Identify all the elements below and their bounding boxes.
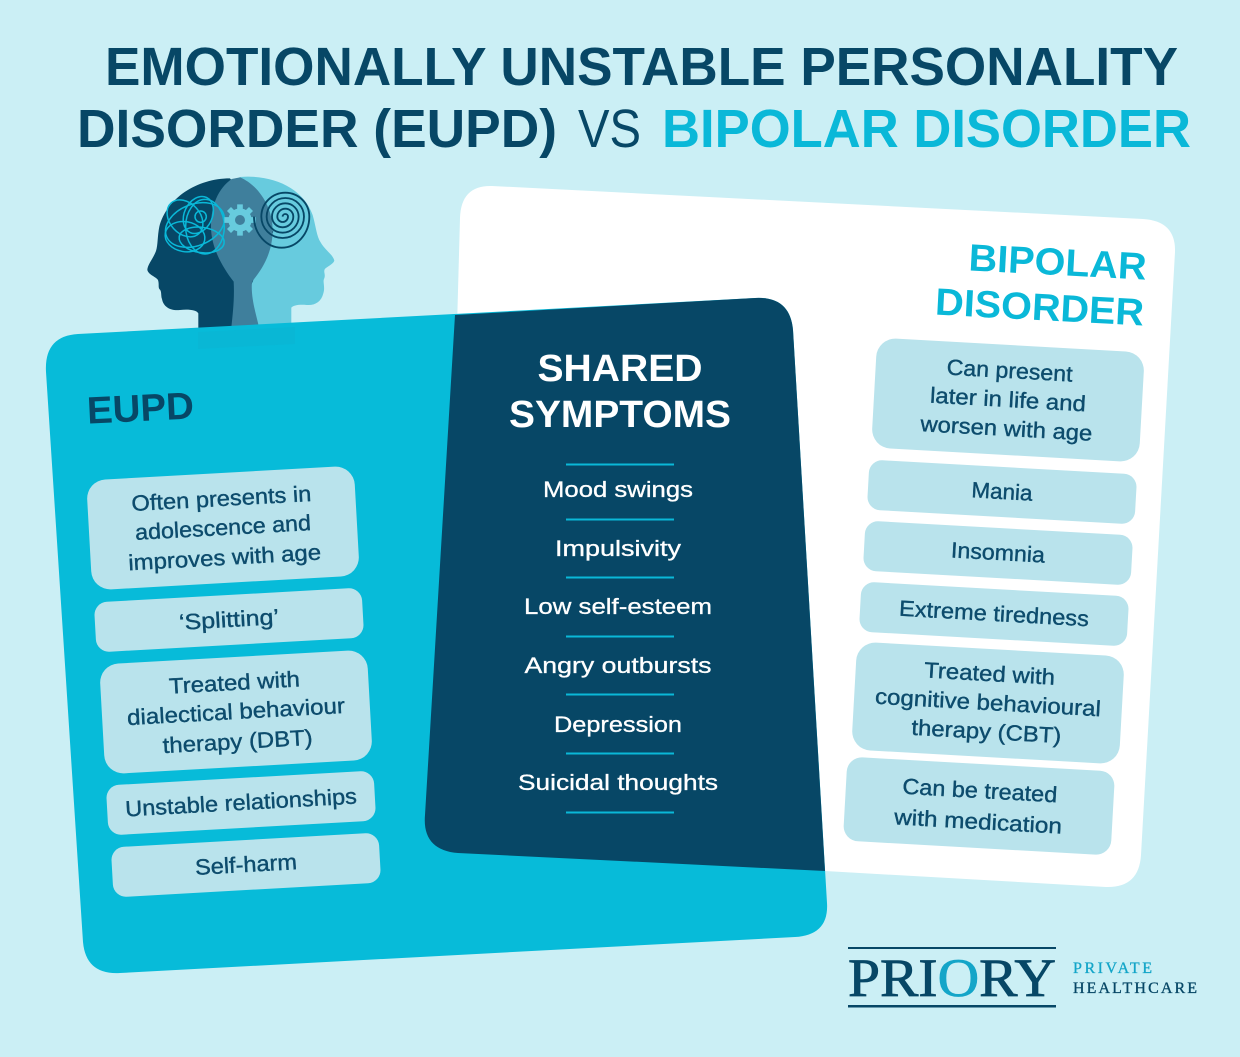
panel: EUPD background [46,298,827,973]
item: onset [871,338,1145,462]
item: insomnia: Insomnia [950,537,1046,568]
item: tiredness [859,582,1129,646]
icon: tangled thoughts [159,192,231,256]
item: DBT: Treated with [168,666,300,699]
panel: shared symptoms background [425,298,825,871]
item: onset: adolescence and [134,510,312,545]
logo: Priory Private Healthcare: HEALTHCARE [1073,980,1197,997]
item: medication: with medication [892,804,1063,839]
item: DBT: therapy (DBT) [162,725,313,758]
item: medication [843,757,1115,855]
heading: shared symptoms: SHARED [538,348,702,390]
item: relationships: Unstable relationships [124,784,357,821]
title: VS [578,99,641,159]
panel: bipolar disorder background [455,186,1175,887]
icon: gear [224,204,256,236]
title: DISORDER (EUPD) [77,99,557,159]
list: shared symptoms: Mood swings [543,477,693,502]
list: bipolar items [843,338,1145,855]
item: CBT: Treated with [924,657,1056,690]
head shadow [198,327,295,349]
dark head [147,178,273,329]
item: splitting: ‘Splitting’ [178,604,280,635]
logo: Priory Private Healthcare: PRIVATE [1073,960,1152,977]
item: onset: Can present [946,355,1073,387]
item: relationships [106,771,376,835]
item: onset [86,466,360,590]
light head [213,177,334,327]
item: onset: Often presents in [131,481,312,516]
item: medication: Can be treated [902,774,1058,807]
title: EMOTIONALLY UNSTABLE PERSONALITY [105,37,1178,97]
heading: bipolar disorder [934,237,1148,334]
overlap [211,177,273,328]
list: shared symptoms: Low self-esteem [524,594,712,619]
item: onset: worsen with age [919,411,1093,446]
heading: EUPD: EUPD [86,385,195,433]
item: CBT: therapy (CBT) [911,715,1062,748]
item: DBT [99,650,373,774]
list: shared symptoms [518,464,718,812]
heading: shared symptoms: SYMPTOMS [509,394,731,436]
item: mania [867,460,1137,524]
item: insomnia [863,521,1133,585]
title: BIPOLAR DISORDER [662,99,1191,159]
item: onset: improves with age [128,540,322,575]
icon: two overlapping heads [147,177,334,329]
icon: spiral [254,193,309,248]
item: DBT: dialectical behaviour [126,693,345,730]
list: EUPD items [86,466,381,897]
heading: bipolar disorder: DISORDER [934,282,1145,334]
logo: Priory Private Healthcare: PRIORY [848,948,1056,1008]
title [77,37,1191,159]
list: shared symptoms: Suicidal thoughts [518,770,718,795]
item: mania: Mania [971,477,1034,506]
item: self-harm [111,833,381,897]
list: shared symptoms: Depression [554,712,682,737]
heading: bipolar disorder: BIPOLAR [968,237,1148,289]
heading: shared symptoms [509,348,731,436]
list: shared symptoms: Angry outbursts [524,653,712,678]
list: shared symptoms: Impulsivity [555,536,681,561]
logo: Priory Private Healthcare [848,947,1197,1008]
item: CBT [851,642,1125,764]
item: tiredness: Extreme tiredness [898,596,1090,631]
item: CBT: cognitive behavioural [875,684,1102,721]
item: self-harm: Self-harm [194,849,298,880]
item: onset: later in life and [929,383,1087,416]
item: splitting [94,588,364,652]
